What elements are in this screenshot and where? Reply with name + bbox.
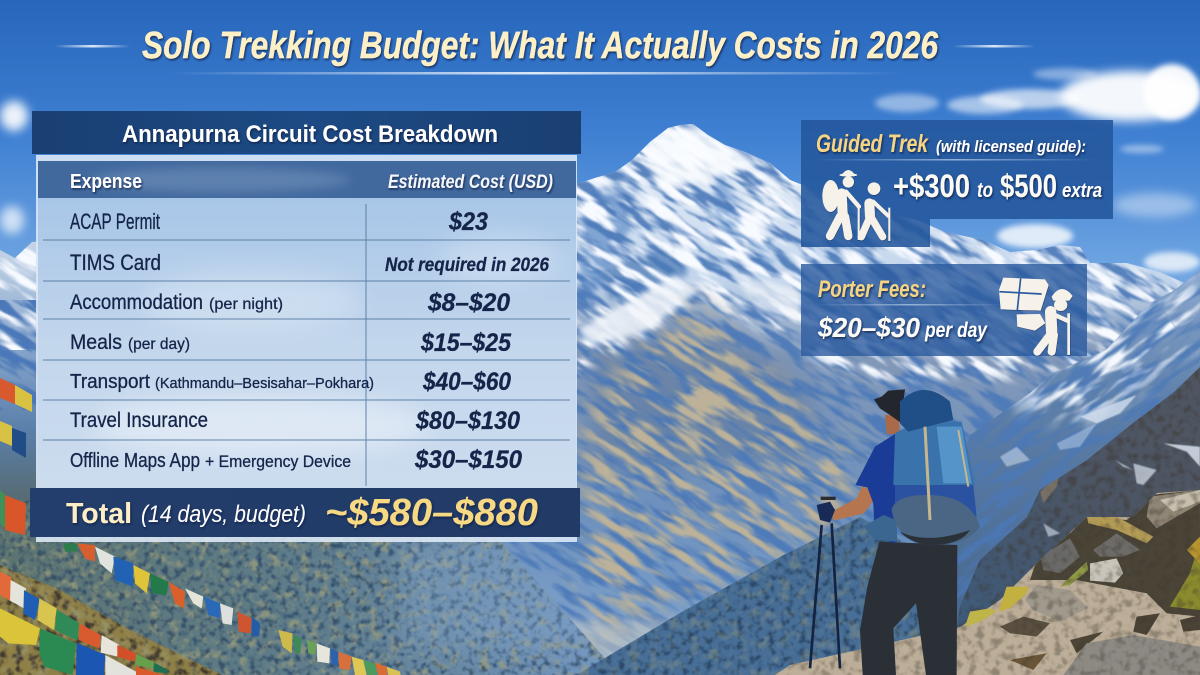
hat — [874, 389, 905, 423]
row: Accommodation: (per night) — [209, 296, 283, 313]
porter price — [817, 312, 988, 343]
row: Transport: Transport — [70, 371, 150, 393]
guided trek price: extra — [1062, 180, 1102, 202]
hip pouch — [863, 515, 897, 542]
row: Offline Maps App + Emergency Device: + Emergency Device — [205, 452, 351, 471]
prayer flags: lower left strings — [0, 490, 401, 675]
panel: cost breakdown table — [30, 111, 581, 542]
mountain: right blue ridge — [948, 270, 1200, 626]
row: Offline Maps App + Emergency Device: Offline Maps App — [70, 450, 200, 472]
table header row: Expense — [70, 171, 142, 193]
total row: Total — [66, 498, 132, 530]
guided trek heading: Guided Trek — [816, 130, 929, 158]
row: Transport: $40–$60 — [422, 368, 511, 396]
row: Transport — [70, 368, 511, 396]
row: Travel Insurance: Travel Insurance — [70, 409, 208, 432]
row: Transport: (Kathmandu–Besisahar–Pokhara) — [155, 375, 374, 392]
arm — [832, 485, 876, 521]
clouds — [0, 64, 1200, 272]
neck — [885, 415, 899, 434]
total row — [30, 488, 580, 537]
mountain: dark front ridge — [957, 367, 1200, 628]
legs and trousers — [860, 542, 957, 675]
row: Meals: Meals — [70, 331, 122, 354]
icon: guide and trekker — [822, 170, 890, 241]
ridge snow patches — [1040, 443, 1200, 537]
guided trek price: to — [977, 179, 993, 202]
panel: porter fees — [801, 264, 1087, 356]
prayer flags: far left — [0, 378, 32, 458]
guided trek heading — [816, 130, 1086, 158]
icon: porter with load — [999, 278, 1073, 355]
total row: (14 days, budget) — [141, 501, 306, 528]
valley: forested slope behind hiker — [572, 517, 920, 675]
title: Solo Trekking Budget: What It Actually Costs in 2026 — [142, 25, 939, 67]
porter price: per day — [924, 319, 988, 342]
total row: ~$580–$880 — [325, 492, 538, 534]
panel heading — [32, 111, 581, 154]
row: Offline Maps App + Emergency Device — [70, 446, 522, 474]
row: Accommodation: $8–$20 — [427, 289, 510, 317]
mountain: main snow peak — [500, 120, 1200, 675]
porter price: $20–$30 — [817, 312, 920, 343]
row: Accommodation: Accommodation — [70, 291, 203, 314]
shirt — [855, 434, 897, 543]
porter fees heading: Porter Fees: — [818, 276, 926, 303]
guided trek price: +$300 — [893, 168, 970, 204]
row: ACAP Permit: $23 — [448, 208, 488, 236]
title rules — [55, 45, 1035, 74]
row: ACAP Permit: ACAP Permit — [70, 209, 160, 234]
rocks and moss — [1000, 490, 1200, 675]
snow patches on ridge — [1000, 395, 1137, 467]
table header row: Estimated Cost (USD) — [388, 172, 553, 193]
row: Travel Insurance — [70, 407, 520, 435]
row: Offline Maps App + Emergency Device: $30–$150 — [414, 446, 522, 474]
panel heading: Annapurna Circuit Cost Breakdown — [122, 121, 498, 148]
row: Accommodation — [70, 289, 510, 317]
icon: trekking poles — [810, 497, 840, 668]
hillside: near slope lower left — [0, 560, 225, 675]
mountain shadow facets — [575, 170, 810, 470]
hiker — [810, 389, 980, 675]
dry grass tufts — [965, 587, 1028, 627]
row: Meals — [70, 329, 512, 357]
snowfields — [578, 125, 800, 345]
row: TIMS Card: TIMS Card — [70, 250, 161, 275]
row: TIMS Card — [70, 250, 549, 276]
mountain: left range beside table — [0, 242, 38, 500]
row: Meals: (per day) — [128, 336, 190, 353]
row: ACAP Permit — [70, 208, 488, 236]
panel: guided trek — [801, 120, 1113, 247]
table body — [36, 155, 577, 542]
guided trek heading: (with licensed guide): — [936, 137, 1086, 156]
table header row — [38, 161, 576, 198]
backpack — [892, 390, 980, 545]
row: TIMS Card: Not required in 2026 — [385, 255, 549, 276]
row: Travel Insurance: $80–$130 — [415, 407, 520, 435]
guided trek price: $500 — [1000, 168, 1057, 204]
glove — [817, 502, 835, 523]
hillside: far slope lower left — [0, 500, 620, 675]
foreground rocky trail — [775, 490, 1200, 675]
guided trek price — [893, 168, 1102, 204]
row: Meals: $15–$25 — [420, 329, 512, 357]
